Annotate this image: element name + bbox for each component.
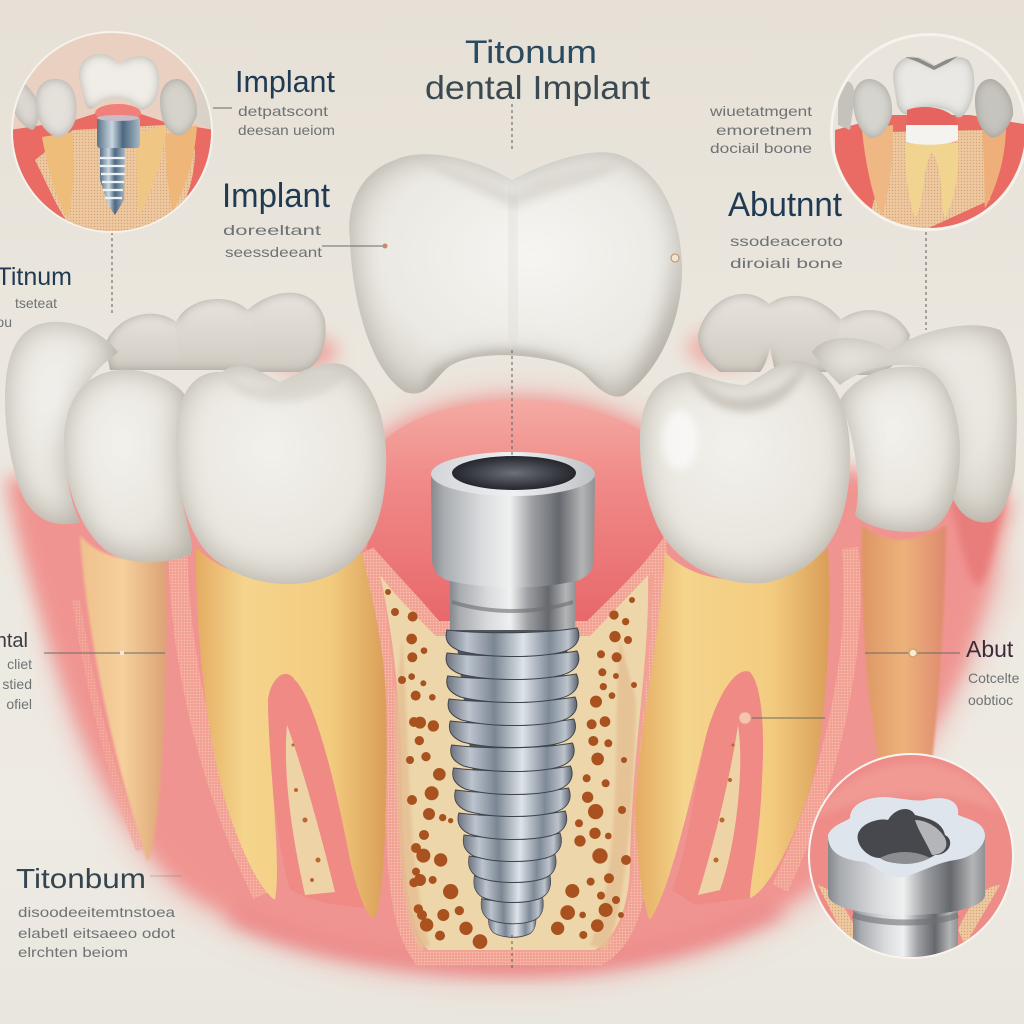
- bone marrow holes: [385, 589, 637, 949]
- text: main title: Titonum: [465, 34, 597, 70]
- label: left middle: cliet: [7, 656, 32, 672]
- label: abutment right edge: Cotcelte: [968, 670, 1020, 686]
- inset roots: [862, 125, 893, 215]
- label: implant lower: doreeltant: [223, 222, 321, 238]
- right second tooth root: [862, 525, 946, 765]
- inset gum band: [907, 107, 952, 115]
- inset teeth: [838, 82, 855, 130]
- far left tooth: [5, 322, 118, 524]
- label: left middle: [0, 630, 32, 712]
- inset roots: [42, 132, 73, 218]
- inset crown: [893, 57, 974, 118]
- label: abutment: Abutnnt: [728, 186, 843, 224]
- back teeth right: [687, 294, 910, 375]
- label: left middle: stied: [2, 676, 32, 692]
- inset bone edges: [818, 885, 853, 938]
- label: implant upper: deesan ueiom: [238, 122, 335, 138]
- implant core: [455, 630, 570, 925]
- inset circle: natural tooth section: [830, 30, 1024, 235]
- label: implant upper: detpatscont: [238, 103, 328, 119]
- inset gum: [835, 115, 1024, 235]
- bone around the implant: [368, 552, 660, 958]
- text: main title: dental Implant: [425, 69, 650, 106]
- right periodontal band: [780, 548, 852, 888]
- label: abutment right edge: [966, 636, 1020, 708]
- label: abutment right edge: oobtioc: [968, 692, 1013, 708]
- label: titanium bottom left: disoodeeitemtnstoea: [18, 904, 175, 920]
- text: main title: [425, 34, 650, 106]
- second right tooth: [840, 367, 960, 532]
- inset teeth: [14, 84, 38, 130]
- label: implant upper: Implant: [235, 64, 335, 99]
- implant threads: [446, 628, 579, 937]
- inset gum: [13, 114, 211, 231]
- label: titanium bottom left: elrchten beiom: [18, 944, 128, 960]
- label: implant lower: [222, 177, 331, 260]
- floating crown: [349, 152, 690, 400]
- implant rim: [431, 452, 595, 496]
- inset bone: [35, 125, 195, 232]
- label: upper right description: wiuetatmgent: [709, 103, 812, 119]
- label: upper right description: emoretnem: [716, 122, 812, 138]
- label: abutment: [728, 186, 843, 271]
- inset abutment body: [853, 910, 958, 957]
- label: upper right description: dociail boone: [710, 140, 812, 156]
- inset white block: [906, 125, 958, 145]
- inset circle: implant in jaw: [8, 30, 215, 240]
- label: implant lower: seessdeeant: [225, 244, 322, 260]
- second left tooth: [64, 370, 192, 562]
- far right tooth: [812, 325, 1017, 522]
- label: abutment: ssodeaceroto: [730, 233, 843, 249]
- left periodontal band: [178, 555, 262, 895]
- label: abutment: diroiali bone: [730, 255, 843, 271]
- inset circle: abutment top view: [805, 750, 1017, 962]
- implant head: [431, 452, 595, 588]
- implant socket: [452, 456, 576, 490]
- inset gum pad: [95, 104, 141, 117]
- left front tooth crown: [176, 363, 386, 584]
- label: left middle: ofiel: [6, 696, 32, 712]
- titanium implant: [431, 452, 595, 937]
- inset implant: [97, 115, 140, 215]
- back teeth left: [105, 293, 338, 372]
- inset abutment top: [828, 797, 985, 877]
- right front tooth crown: [640, 361, 850, 583]
- label: titanium bottom left: elabetl eitsaeeo odot: [18, 925, 175, 941]
- inset abutment collar: [853, 915, 958, 922]
- inset crown: [79, 54, 159, 110]
- leader lines: [44, 104, 960, 970]
- label: titanium left edge: [0, 263, 72, 330]
- gum and jaw base: [5, 400, 1014, 972]
- label: abutment right edge: Abut: [966, 636, 1014, 662]
- left front tooth root: [196, 548, 387, 918]
- label: titanium bottom left: [16, 863, 175, 960]
- label: upper right description: [709, 103, 812, 156]
- label: titanium bottom left: Titonbum: [16, 863, 146, 894]
- inset socket: [858, 809, 950, 863]
- label: implant upper: [235, 64, 335, 138]
- implant neck: [450, 570, 576, 638]
- label: titanium left edge: tseteat: [15, 295, 57, 311]
- left second tooth root: [80, 535, 166, 862]
- right front tooth root: [636, 548, 829, 920]
- label: implant lower: Implant: [222, 177, 331, 215]
- inset bone: [870, 130, 990, 232]
- left outer band: [76, 600, 140, 850]
